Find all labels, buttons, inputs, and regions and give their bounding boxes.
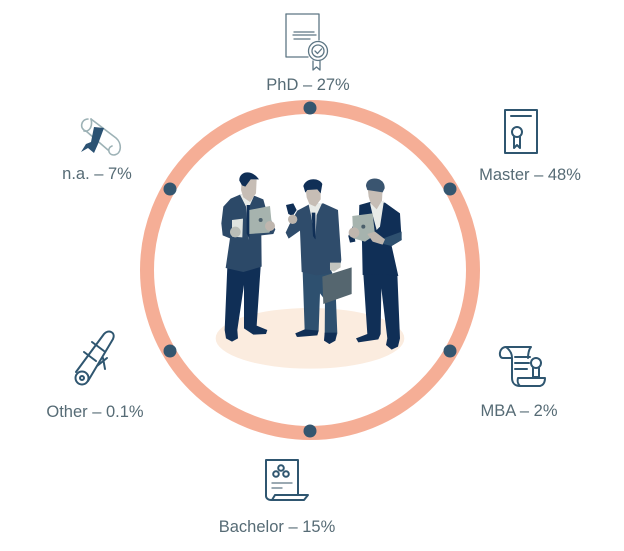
icon: Other rolled scroll xyxy=(76,332,114,384)
label: Bachelor: Bachelor – 15% xyxy=(219,518,336,536)
man right xyxy=(348,179,402,350)
icon: Master diploma xyxy=(505,110,537,153)
ground ellipse xyxy=(216,308,404,369)
label: MBA: MBA – 2% xyxy=(480,402,558,420)
icon: PhD certificate xyxy=(286,14,328,70)
ring markers xyxy=(164,102,456,438)
icon: MBA scroll xyxy=(500,347,545,386)
man left xyxy=(221,172,275,342)
icon: Bachelor document xyxy=(266,460,308,500)
man middle xyxy=(286,179,352,344)
label: Other: Other – 0.1% xyxy=(46,403,144,421)
ring xyxy=(147,107,473,433)
label: PhD: PhD – 27% xyxy=(266,76,350,94)
label: Master: Master – 48% xyxy=(479,166,581,184)
label: n.a.: n.a. – 7% xyxy=(62,165,132,183)
central illustration: three businessmen xyxy=(216,172,404,369)
icon: n.a. diploma xyxy=(81,119,120,155)
